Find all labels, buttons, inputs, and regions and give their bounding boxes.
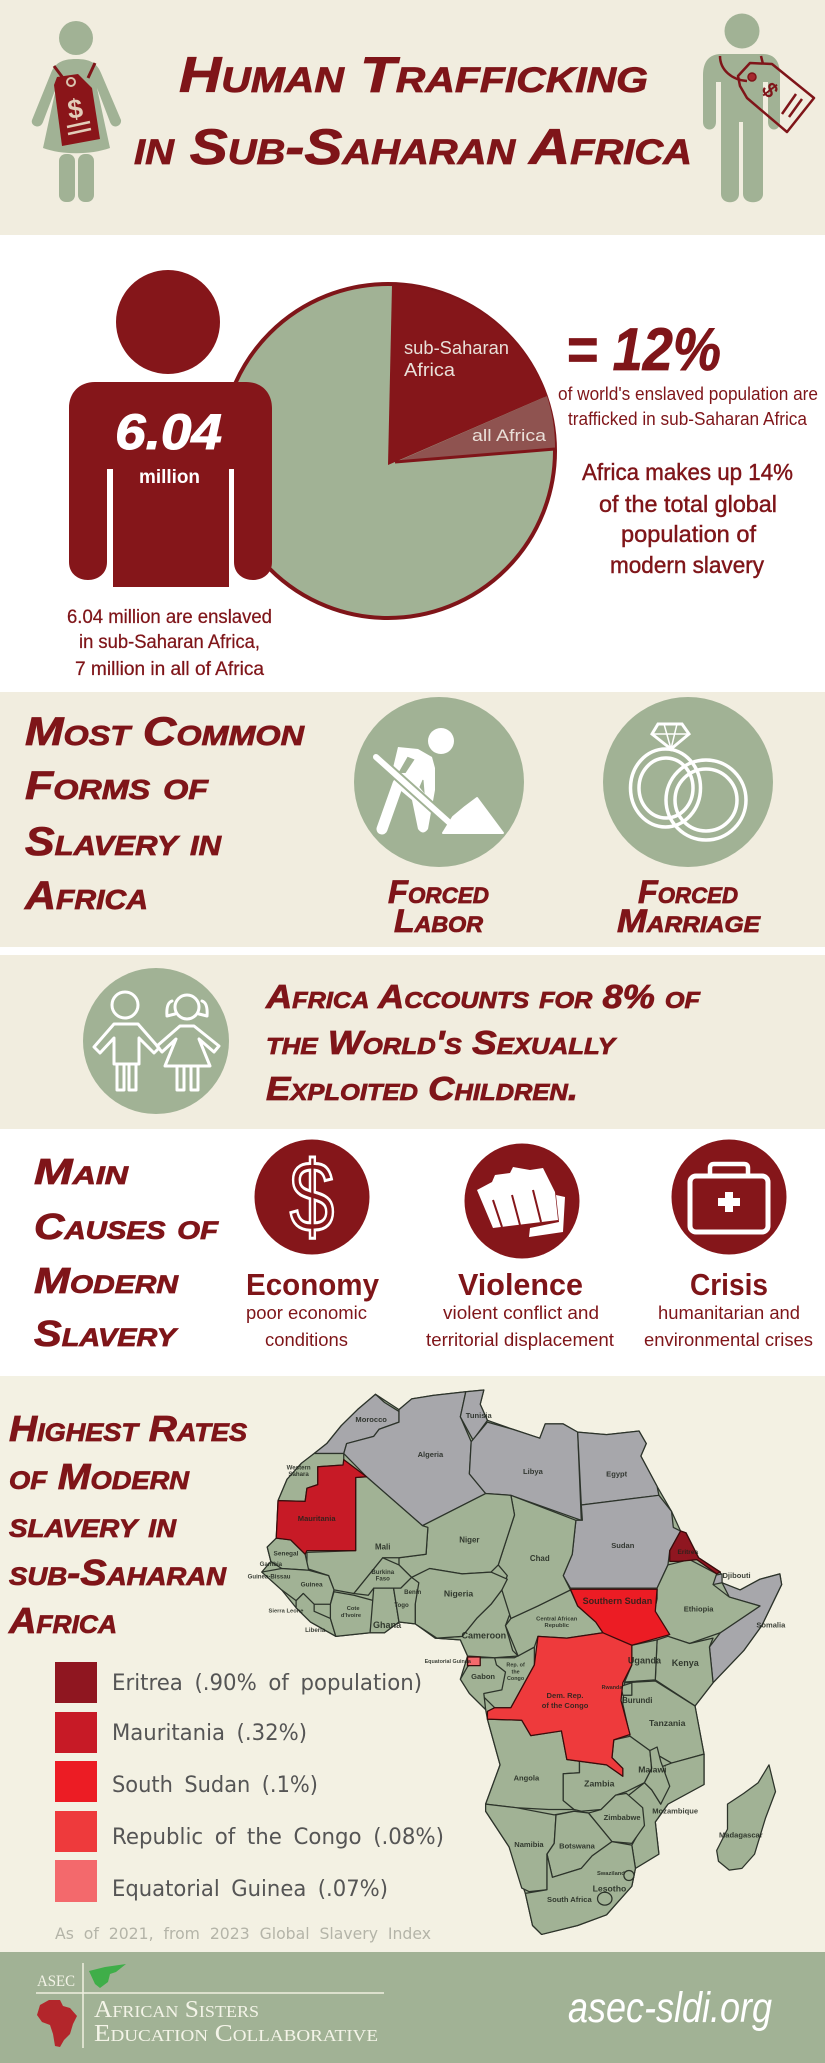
map labels: Central African xyxy=(536,1617,578,1623)
stat: equals 12 percent: = 12% xyxy=(566,316,721,383)
cause: crisis: humanitarian and xyxy=(658,1303,800,1323)
map labels: Kenya xyxy=(672,1658,700,1668)
icon: person with 6.04 million: million xyxy=(139,467,200,488)
map labels: Republic xyxy=(545,1623,570,1629)
heading: main causes: Main xyxy=(34,1151,129,1192)
label: forced labor xyxy=(388,874,489,939)
pie label: sub-Saharan Africa: sub-Saharan xyxy=(404,338,509,358)
map labels: Tanzania xyxy=(649,1718,686,1728)
pie label: sub-Saharan Africa: Africa xyxy=(404,360,456,380)
text: Africa makes up 14% xyxy=(582,459,793,578)
map labels: Western xyxy=(287,1465,311,1472)
map labels: Burkina xyxy=(371,1569,395,1576)
panel: main causes of modern slavery xyxy=(34,1140,813,1354)
map labels: Liberia xyxy=(305,1627,326,1634)
logo: ASEC xyxy=(36,1963,384,2048)
cause: crisis: Crisis xyxy=(690,1267,768,1302)
legend: Eritrea (.90% of population) xyxy=(112,1671,422,1696)
map labels: Algeria xyxy=(418,1450,444,1459)
map labels: Gambia xyxy=(260,1561,283,1568)
map labels: Cote xyxy=(347,1606,360,1612)
icon: person with 6.04 million: 6.04 xyxy=(115,404,222,460)
pie chart xyxy=(221,284,555,618)
icon: Africa xyxy=(37,2000,77,2047)
panel: enslaved population statistics xyxy=(67,270,818,680)
heading: most common forms: Africa xyxy=(24,874,148,918)
title: in Sub-Saharan Africa xyxy=(134,119,692,175)
map labels: Ghana xyxy=(373,1620,402,1630)
cause: violence: Violence xyxy=(458,1267,583,1302)
pie label: sub-Saharan Africa xyxy=(404,338,509,380)
map labels: Botswana xyxy=(559,1841,596,1850)
heading: highest rates xyxy=(8,1408,247,1641)
label: forced labor: Forced xyxy=(388,874,489,910)
heading: Africa accounts for 8% xyxy=(265,978,701,1107)
icon: North America xyxy=(89,1964,126,1988)
map labels: Swaziland xyxy=(597,1871,625,1877)
label: forced marriage xyxy=(617,874,761,939)
map labels: Faso xyxy=(376,1576,390,1583)
map labels: Guinea-Bissau xyxy=(248,1574,291,1580)
map labels: d'Ivoire xyxy=(341,1613,361,1619)
heading: most common forms: Most Common xyxy=(25,710,305,754)
text: world's enslaved population: trafficked in sub-Saharan Africa xyxy=(568,409,808,429)
heading: main causes: Modern xyxy=(34,1260,179,1301)
map labels: Eritrea xyxy=(678,1549,698,1556)
map labels: Mali xyxy=(375,1543,390,1552)
map labels: Sahara xyxy=(288,1471,309,1478)
heading: most common forms: Forms of xyxy=(25,764,209,808)
text: Africa makes up 14%: population of xyxy=(621,521,757,547)
icon: fist xyxy=(464,1144,580,1258)
legend: Republic of the Congo (.08%) xyxy=(112,1825,444,1850)
map labels: Tunisia xyxy=(466,1411,493,1420)
cause: economy: Economy xyxy=(246,1267,380,1302)
map labels: Namibia xyxy=(514,1840,544,1849)
map labels: South Africa xyxy=(547,1895,593,1904)
heading: most common forms xyxy=(24,710,305,918)
text: world's enslaved population: of world's enslaved population are xyxy=(558,384,818,404)
map labels: Rwanda xyxy=(602,1685,623,1691)
country: Democratic Republic of the Congo xyxy=(487,1633,632,1776)
panel: header xyxy=(0,0,825,235)
map labels: Morocco xyxy=(355,1415,387,1424)
map labels: Gabon xyxy=(471,1672,495,1681)
map labels: Malawi xyxy=(638,1765,667,1775)
map labels: Guinea xyxy=(301,1582,323,1589)
title: Human Trafficking xyxy=(179,47,648,103)
cause: economy xyxy=(246,1267,380,1350)
icon: woman with price tag: $ xyxy=(66,93,85,125)
panel: most common forms of slavery xyxy=(0,692,825,947)
map labels: Angola xyxy=(514,1774,540,1783)
label: forced marriage: Marriage xyxy=(617,903,761,939)
heading: main causes: Slavery xyxy=(34,1313,179,1354)
cause: violence: violent conflict and xyxy=(443,1303,599,1323)
heading: most common forms: Slavery in xyxy=(25,820,222,864)
icon: children holding hands xyxy=(83,968,229,1114)
heading: main causes xyxy=(34,1151,219,1354)
map labels: Sierra Leone xyxy=(269,1608,303,1614)
logo: ASEC: ASEC xyxy=(37,1973,75,1990)
legend xyxy=(55,1662,444,1902)
map labels: Burundi xyxy=(622,1696,652,1705)
heading: highest rates: Highest Rates xyxy=(9,1408,247,1449)
label: forced labor: Labor xyxy=(394,903,483,939)
map labels: Djibouti xyxy=(722,1571,751,1580)
heading: Africa accounts for 8%: Exploited Children. xyxy=(266,1070,578,1107)
panel: highest rates map xyxy=(0,1376,825,1952)
icon: dollar xyxy=(254,1140,370,1254)
logo: ASEC: African Sisters xyxy=(94,1997,259,2023)
heading: highest rates: of Modern xyxy=(9,1456,190,1497)
map labels: Senegal xyxy=(274,1551,299,1558)
cause: violence xyxy=(426,1267,614,1350)
heading: highest rates: sub-Saharan xyxy=(9,1552,227,1593)
legend: South Sudan (.1%) xyxy=(112,1773,318,1798)
text: world's enslaved population xyxy=(558,384,818,429)
map labels: of the Congo xyxy=(542,1701,589,1710)
text: Africa makes up 14%: of the total global xyxy=(599,491,777,517)
caption: enslaved numbers xyxy=(67,607,272,680)
map labels: Chad xyxy=(530,1554,550,1563)
map labels: Zimbabwe xyxy=(604,1813,641,1822)
heading: highest rates: Africa xyxy=(8,1600,117,1641)
map labels: Ethiopia xyxy=(684,1604,714,1613)
icon: man with price tag xyxy=(703,14,814,202)
map labels: Mozambique xyxy=(652,1807,698,1816)
cause: economy: poor economic xyxy=(246,1303,367,1323)
map labels: Dem. Rep. xyxy=(547,1691,584,1700)
map labels: Sudan xyxy=(611,1541,635,1550)
legend: Equatorial Guinea (.07%) xyxy=(112,1877,388,1902)
heading: Africa accounts for 8%: Africa Accounts for 8% of xyxy=(265,978,701,1015)
map labels: Zambia xyxy=(584,1778,615,1788)
pie label: all Africa: all Africa xyxy=(472,426,547,445)
caption: enslaved numbers: 7 million in all of Africa xyxy=(75,659,264,680)
heading: main causes: Causes of xyxy=(34,1206,219,1247)
map of Africa xyxy=(248,1390,786,1934)
icon: dollar: $ xyxy=(290,1142,334,1253)
cause: violence: territorial displacement xyxy=(426,1330,614,1350)
country: South Sudan xyxy=(570,1589,670,1645)
map labels: Congo xyxy=(507,1676,525,1682)
map labels: Nigeria xyxy=(444,1588,473,1598)
heading: Africa accounts for 8%: the World's Sexually xyxy=(266,1024,618,1061)
title xyxy=(134,47,692,175)
map labels xyxy=(248,1411,786,1904)
cause: economy: conditions xyxy=(265,1330,348,1350)
country: Eritrea xyxy=(670,1531,720,1574)
cause: crisis: environmental crises xyxy=(644,1330,813,1350)
map labels: Niger xyxy=(459,1535,480,1544)
map labels: Somalia xyxy=(756,1620,786,1629)
caption: enslaved numbers: in sub-Saharan Africa, xyxy=(79,632,260,653)
country: Equatorial Guinea xyxy=(468,1657,480,1666)
heading: highest rates: slavery in xyxy=(9,1504,177,1545)
map labels: Uganda xyxy=(628,1656,662,1665)
map labels: Libya xyxy=(523,1467,544,1476)
map labels: Togo xyxy=(394,1602,409,1609)
map labels: the xyxy=(512,1669,520,1675)
map labels: Mauritania xyxy=(298,1514,336,1523)
logo: ASEC: Education Collaborative xyxy=(94,2021,378,2047)
map labels: Lesotho xyxy=(593,1884,626,1894)
label: forced marriage: Forced xyxy=(638,874,738,910)
source note: As of 2021, from 2023 Global Slavery Index xyxy=(55,1924,431,1943)
icon: medical case xyxy=(672,1140,786,1254)
map labels: Equatorial Guinea xyxy=(425,1659,472,1665)
map labels: Southern Sudan xyxy=(583,1596,652,1606)
caption: enslaved numbers: 6.04 million are enslaved xyxy=(67,607,272,628)
text: Africa makes up 14%: Africa makes up 14% xyxy=(582,459,793,485)
country: Mauritania xyxy=(276,1460,366,1554)
legend: Mauritania (.32%) xyxy=(112,1721,307,1746)
map labels: Benin xyxy=(404,1589,421,1596)
icon: forced labor xyxy=(354,697,524,867)
icon: man with price tag: $ xyxy=(757,79,782,102)
map labels: Madagascar xyxy=(719,1831,763,1840)
cause: crisis xyxy=(644,1267,813,1350)
icon: woman with price tag xyxy=(32,21,121,202)
map labels: Egypt xyxy=(606,1469,628,1478)
text: Africa makes up 14%: modern slavery xyxy=(610,552,764,578)
website url: asec-sldi.org xyxy=(568,1984,772,2032)
map labels: Rep. of xyxy=(506,1663,525,1669)
icon: forced marriage xyxy=(603,697,773,867)
panel: sexually exploited children xyxy=(0,955,825,1129)
panel: footer xyxy=(0,1952,825,2063)
icon: person with 6.04 million xyxy=(69,270,272,587)
map labels: Cameroon xyxy=(462,1631,506,1640)
